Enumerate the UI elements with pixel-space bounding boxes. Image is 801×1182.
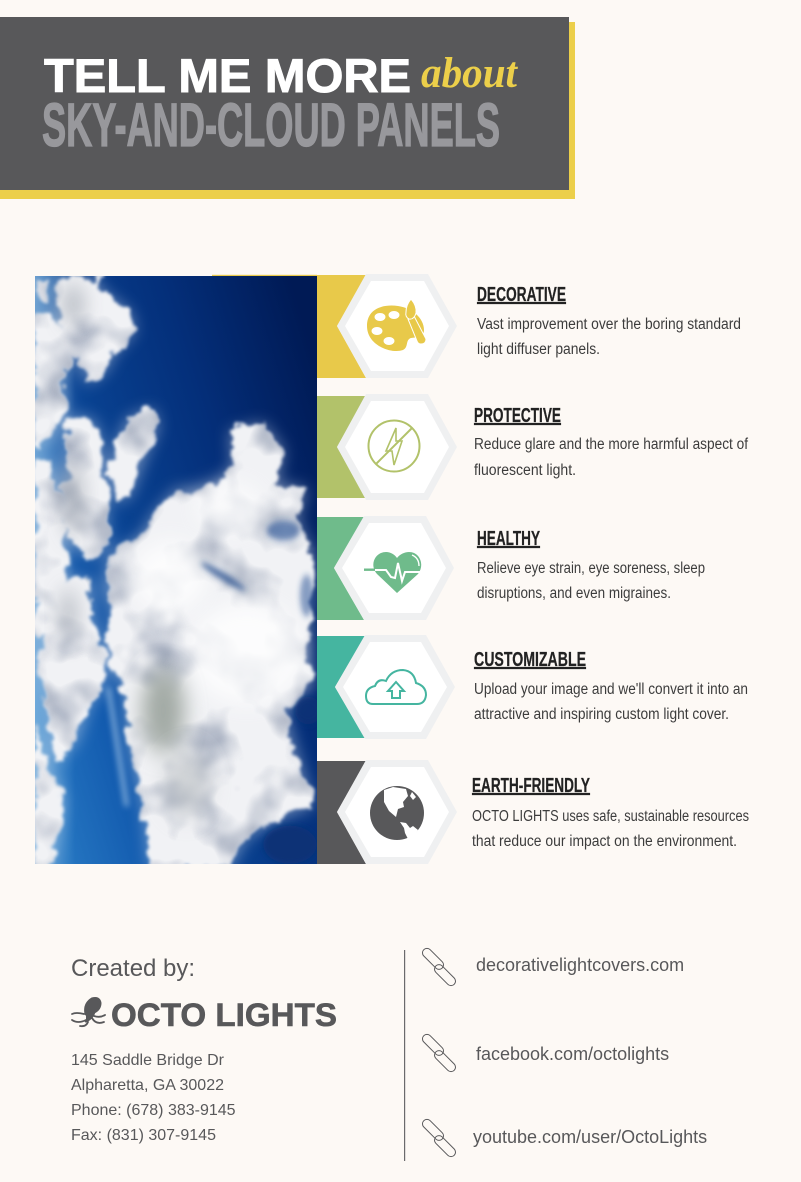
sky and cloud photo <box>35 276 322 868</box>
title script word: about <box>421 50 519 97</box>
address <box>71 1052 236 1144</box>
item: earth-friendly <box>317 760 749 864</box>
icon: painter palette <box>367 299 426 351</box>
heading: CUSTOMIZABLE <box>474 649 586 671</box>
item: healthy <box>317 516 705 620</box>
icon: heart with pulse <box>364 552 421 593</box>
chevron: dark gray <box>317 761 366 864</box>
address: Phone: (678) 383-9145 <box>71 1102 236 1119</box>
title line two: SKY-AND-CLOUD PANELS <box>42 91 500 159</box>
description <box>477 316 741 358</box>
description: Upload your image and we'll convert it into an <box>474 681 748 698</box>
description <box>474 681 748 723</box>
description: disruptions, and even migraines. <box>477 585 671 602</box>
created by label: Created by: <box>71 955 195 982</box>
header banner <box>0 17 575 199</box>
footer: link facebook <box>418 1032 669 1074</box>
description <box>477 560 705 602</box>
item: protective <box>317 394 749 500</box>
address: 145 Saddle Bridge Dr <box>71 1052 225 1069</box>
icon: link <box>418 946 460 988</box>
description: attractive and inspiring custom light cover. <box>474 706 729 723</box>
hexagon badge <box>335 635 455 739</box>
icon: link <box>418 1117 460 1159</box>
chevron: teal green <box>317 517 364 620</box>
description: OCTO LIGHTS uses safe, sustainable resources <box>472 808 749 825</box>
icon: globe <box>370 786 424 840</box>
heading: HEALTHY <box>477 528 540 550</box>
description: Relieve eye strain, eye soreness, sleep <box>477 560 705 577</box>
description <box>474 436 749 479</box>
heading: EARTH-FRIENDLY <box>472 775 590 797</box>
youtube url: youtube.com/user/OctoLights <box>473 1127 707 1147</box>
company name: OCTO LIGHTS <box>111 997 337 1033</box>
description: Reduce glare and the more harmful aspect of <box>474 436 749 453</box>
website url: decorativelightcovers.com <box>476 955 684 975</box>
banner panel <box>0 17 569 190</box>
hexagon badge <box>337 760 457 864</box>
chevron: teal <box>317 636 365 738</box>
banner yellow shadow <box>0 22 575 199</box>
hexagon badge <box>337 394 457 500</box>
icon: no lightning <box>368 420 420 472</box>
footer: company details <box>71 955 337 1144</box>
description: that reduce our impact on the environment. <box>472 833 737 850</box>
description: light diffuser panels. <box>477 341 600 358</box>
logo <box>72 997 337 1033</box>
description <box>472 808 749 850</box>
icon: cloud upload <box>366 670 426 704</box>
heading: PROTECTIVE <box>474 405 561 427</box>
hexagon badge <box>334 516 454 620</box>
chevron: green <box>317 396 366 498</box>
description: Vast improvement over the boring standard <box>477 316 741 333</box>
footer: link youtube <box>418 1117 707 1159</box>
address: Fax: (831) 307-9145 <box>71 1127 216 1144</box>
description: fluorescent light. <box>474 462 576 479</box>
footer: link website <box>418 946 684 988</box>
footer divider <box>404 950 405 1161</box>
chevron: yellow <box>317 275 366 378</box>
title line one: TELL ME MORE <box>44 49 411 102</box>
address: Alpharetta, GA 30022 <box>71 1077 224 1094</box>
icon: link <box>418 1032 460 1074</box>
heading: DECORATIVE <box>477 284 566 306</box>
facebook url: facebook.com/octolights <box>476 1044 669 1064</box>
icon: octopus <box>72 998 105 1026</box>
item: customizable <box>317 635 748 739</box>
item: decorative <box>317 274 741 378</box>
hexagon badge <box>337 274 457 378</box>
yellow accent line above photo <box>212 275 317 276</box>
